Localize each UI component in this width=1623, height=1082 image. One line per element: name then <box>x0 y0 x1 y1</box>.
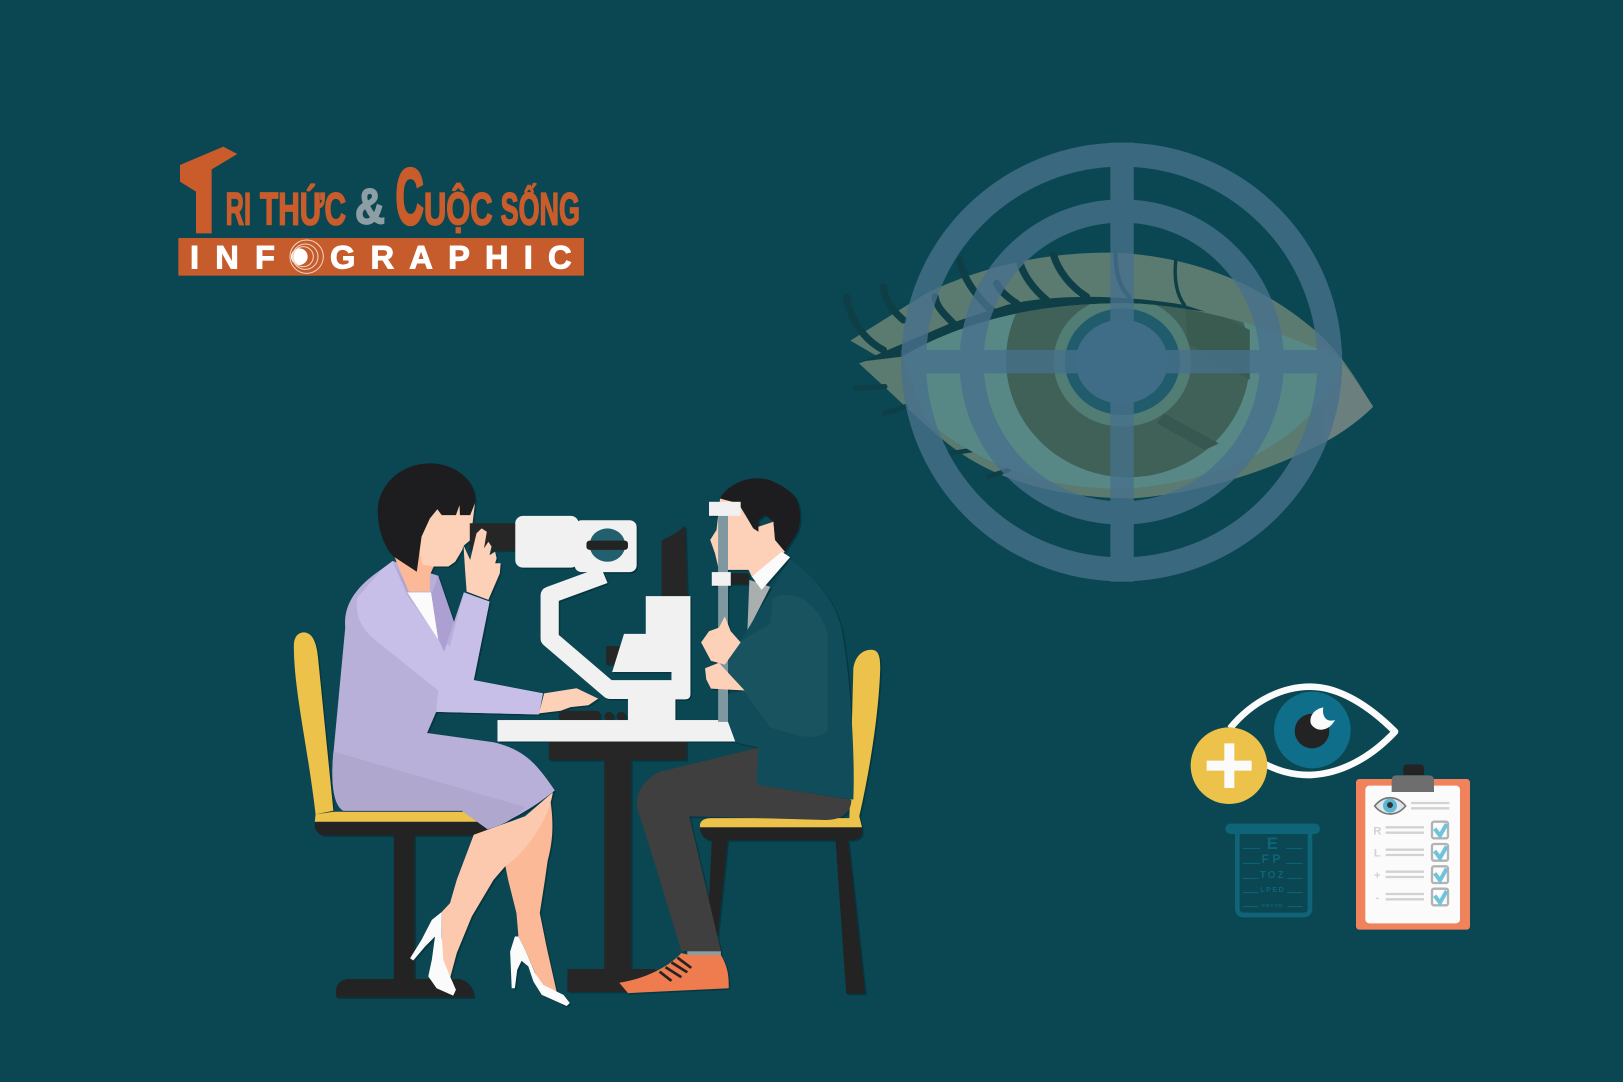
logo wordmark <box>226 152 580 241</box>
icon: eye test chart: TOZ <box>1260 870 1286 881</box>
icon: yellow plus badge <box>1191 727 1267 804</box>
left chair <box>294 632 486 998</box>
machine body <box>608 596 690 722</box>
logo: Tri thức & Cuộc sống Infographic <box>178 147 584 276</box>
woman doctor <box>332 463 598 1006</box>
logo banner <box>178 238 584 276</box>
logo wordmark: C <box>396 152 424 241</box>
logo wordmark: RI <box>226 183 251 234</box>
man patient <box>619 478 854 993</box>
woman white heels <box>410 912 570 1006</box>
clipboard checkboxes <box>1432 822 1448 905</box>
machine articulated arm <box>550 575 636 690</box>
reticle centre <box>1076 320 1168 404</box>
woman hair <box>378 463 475 572</box>
scene: doctor examining patient <box>294 463 880 1006</box>
woman face <box>416 503 475 567</box>
headrest pole <box>709 502 741 722</box>
slit lamp machine <box>470 516 690 722</box>
man trousers <box>637 748 851 951</box>
logo wordmark: & <box>355 179 385 235</box>
icon: eye test chart: FP <box>1262 852 1284 866</box>
large eye with target reticle <box>847 143 1373 582</box>
icon: eye test chart: LPED <box>1260 885 1285 894</box>
man hands <box>701 616 745 690</box>
eye <box>847 243 1373 498</box>
target reticle <box>901 143 1342 582</box>
icon: clipboard: L <box>1374 848 1381 860</box>
icon: clipboard: R <box>1373 825 1381 837</box>
woman legs <box>442 792 557 992</box>
icon: clipboard: - <box>1375 892 1379 904</box>
logo banner: INF <box>190 238 275 275</box>
clipboard small eye <box>1375 798 1406 814</box>
machine black parts <box>470 523 687 665</box>
man face <box>710 498 785 577</box>
chin rest <box>727 573 749 584</box>
icon: clipboard <box>1356 764 1470 930</box>
man hair <box>720 478 800 552</box>
woman raised hand <box>463 528 501 600</box>
icons: eye check, chart and clipboard <box>1191 687 1470 930</box>
man collar and tie <box>747 552 790 632</box>
icon: eye test chart: PECFD <box>1262 903 1284 909</box>
woman suit <box>332 561 555 829</box>
logo wordmark: THỨC <box>260 182 346 234</box>
woman hand on controls <box>539 688 598 713</box>
man jacket <box>723 559 854 800</box>
icon: eye outline <box>1230 687 1395 775</box>
logo banner: GRAPHIC <box>330 238 572 275</box>
icon: clipboard: + <box>1374 870 1381 882</box>
machine controls <box>559 711 626 721</box>
machine eyepiece <box>515 516 579 568</box>
icon: eye test chart <box>1225 824 1320 915</box>
machine head <box>575 520 637 572</box>
icon: eye test chart: E <box>1267 834 1278 853</box>
table <box>497 720 736 992</box>
man shoe <box>619 951 729 993</box>
logo wordmark: SỐNG <box>501 182 580 234</box>
right chair <box>700 650 880 994</box>
illustration canvas <box>178 142 1470 1008</box>
logo wordmark: UỘC <box>424 182 493 234</box>
woman neck <box>395 542 436 592</box>
logo letter T <box>180 147 237 233</box>
